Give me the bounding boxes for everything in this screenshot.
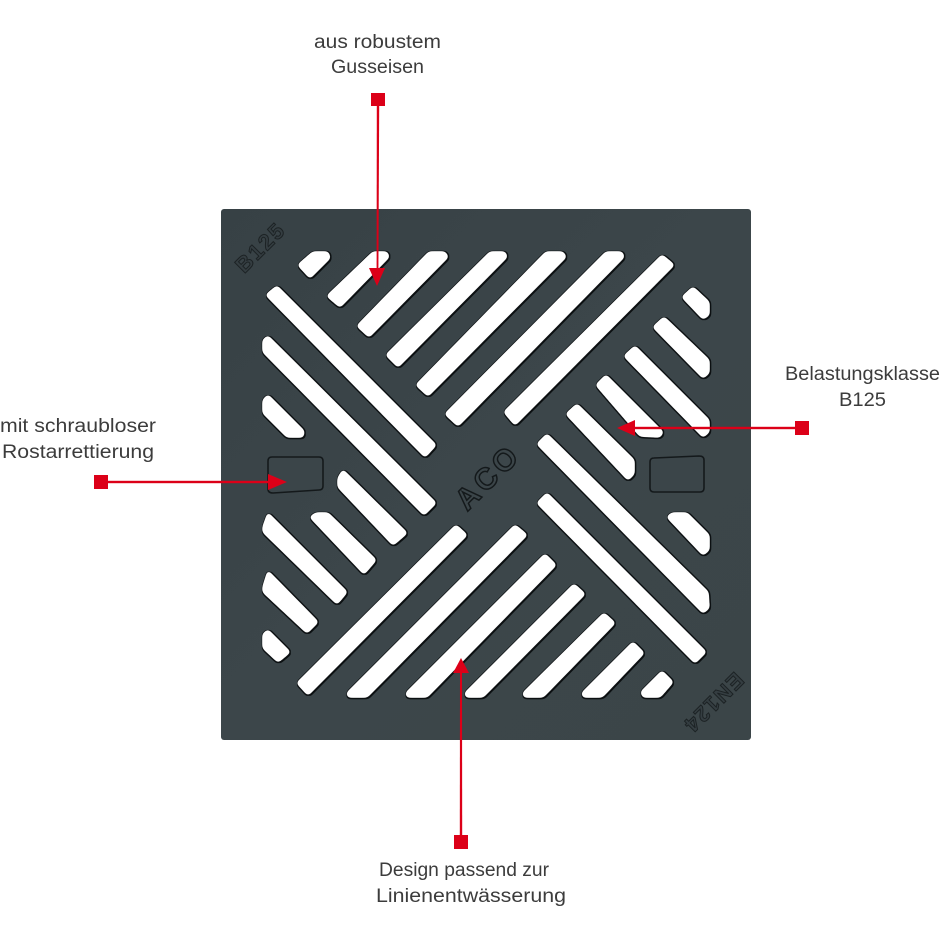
slots: all drain openings: [263, 252, 709, 697]
callout: aus robustem Gusseisen: [314, 32, 441, 286]
callout: mit schraubloser Rostarretierung: [0, 416, 287, 490]
embossed mark EN124: EN124: [678, 667, 749, 738]
recess: left locking square: [268, 457, 323, 493]
label text: Linienentwässerung: [376, 886, 566, 907]
arrow pointing up to grate: [453, 658, 469, 849]
label text: mit schraubloser: [0, 416, 157, 437]
embossed logo ACO: ACO: [449, 438, 528, 517]
arrow pointing left to grate: [617, 420, 809, 436]
panel: cast iron grate: [221, 209, 751, 740]
arrow pointing right to recess: [94, 474, 287, 490]
recess: right locking square: [650, 456, 704, 492]
embossed mark B125: B125: [230, 217, 291, 278]
callout: Design passend zur Linienentwässerung: [376, 658, 566, 907]
label text: B125: [839, 390, 886, 411]
label text: Belastungsklasse: [785, 364, 940, 385]
label text: aus robustem: [314, 32, 441, 53]
callout: Belastungsklasse B125: [617, 364, 940, 436]
label text: Design passend zur: [379, 860, 550, 881]
label text: Rostarrettierung: [2, 442, 154, 463]
grate plate: [221, 209, 751, 740]
arrow pointing down to grate: [369, 93, 385, 286]
label text: Gusseisen: [331, 57, 424, 78]
